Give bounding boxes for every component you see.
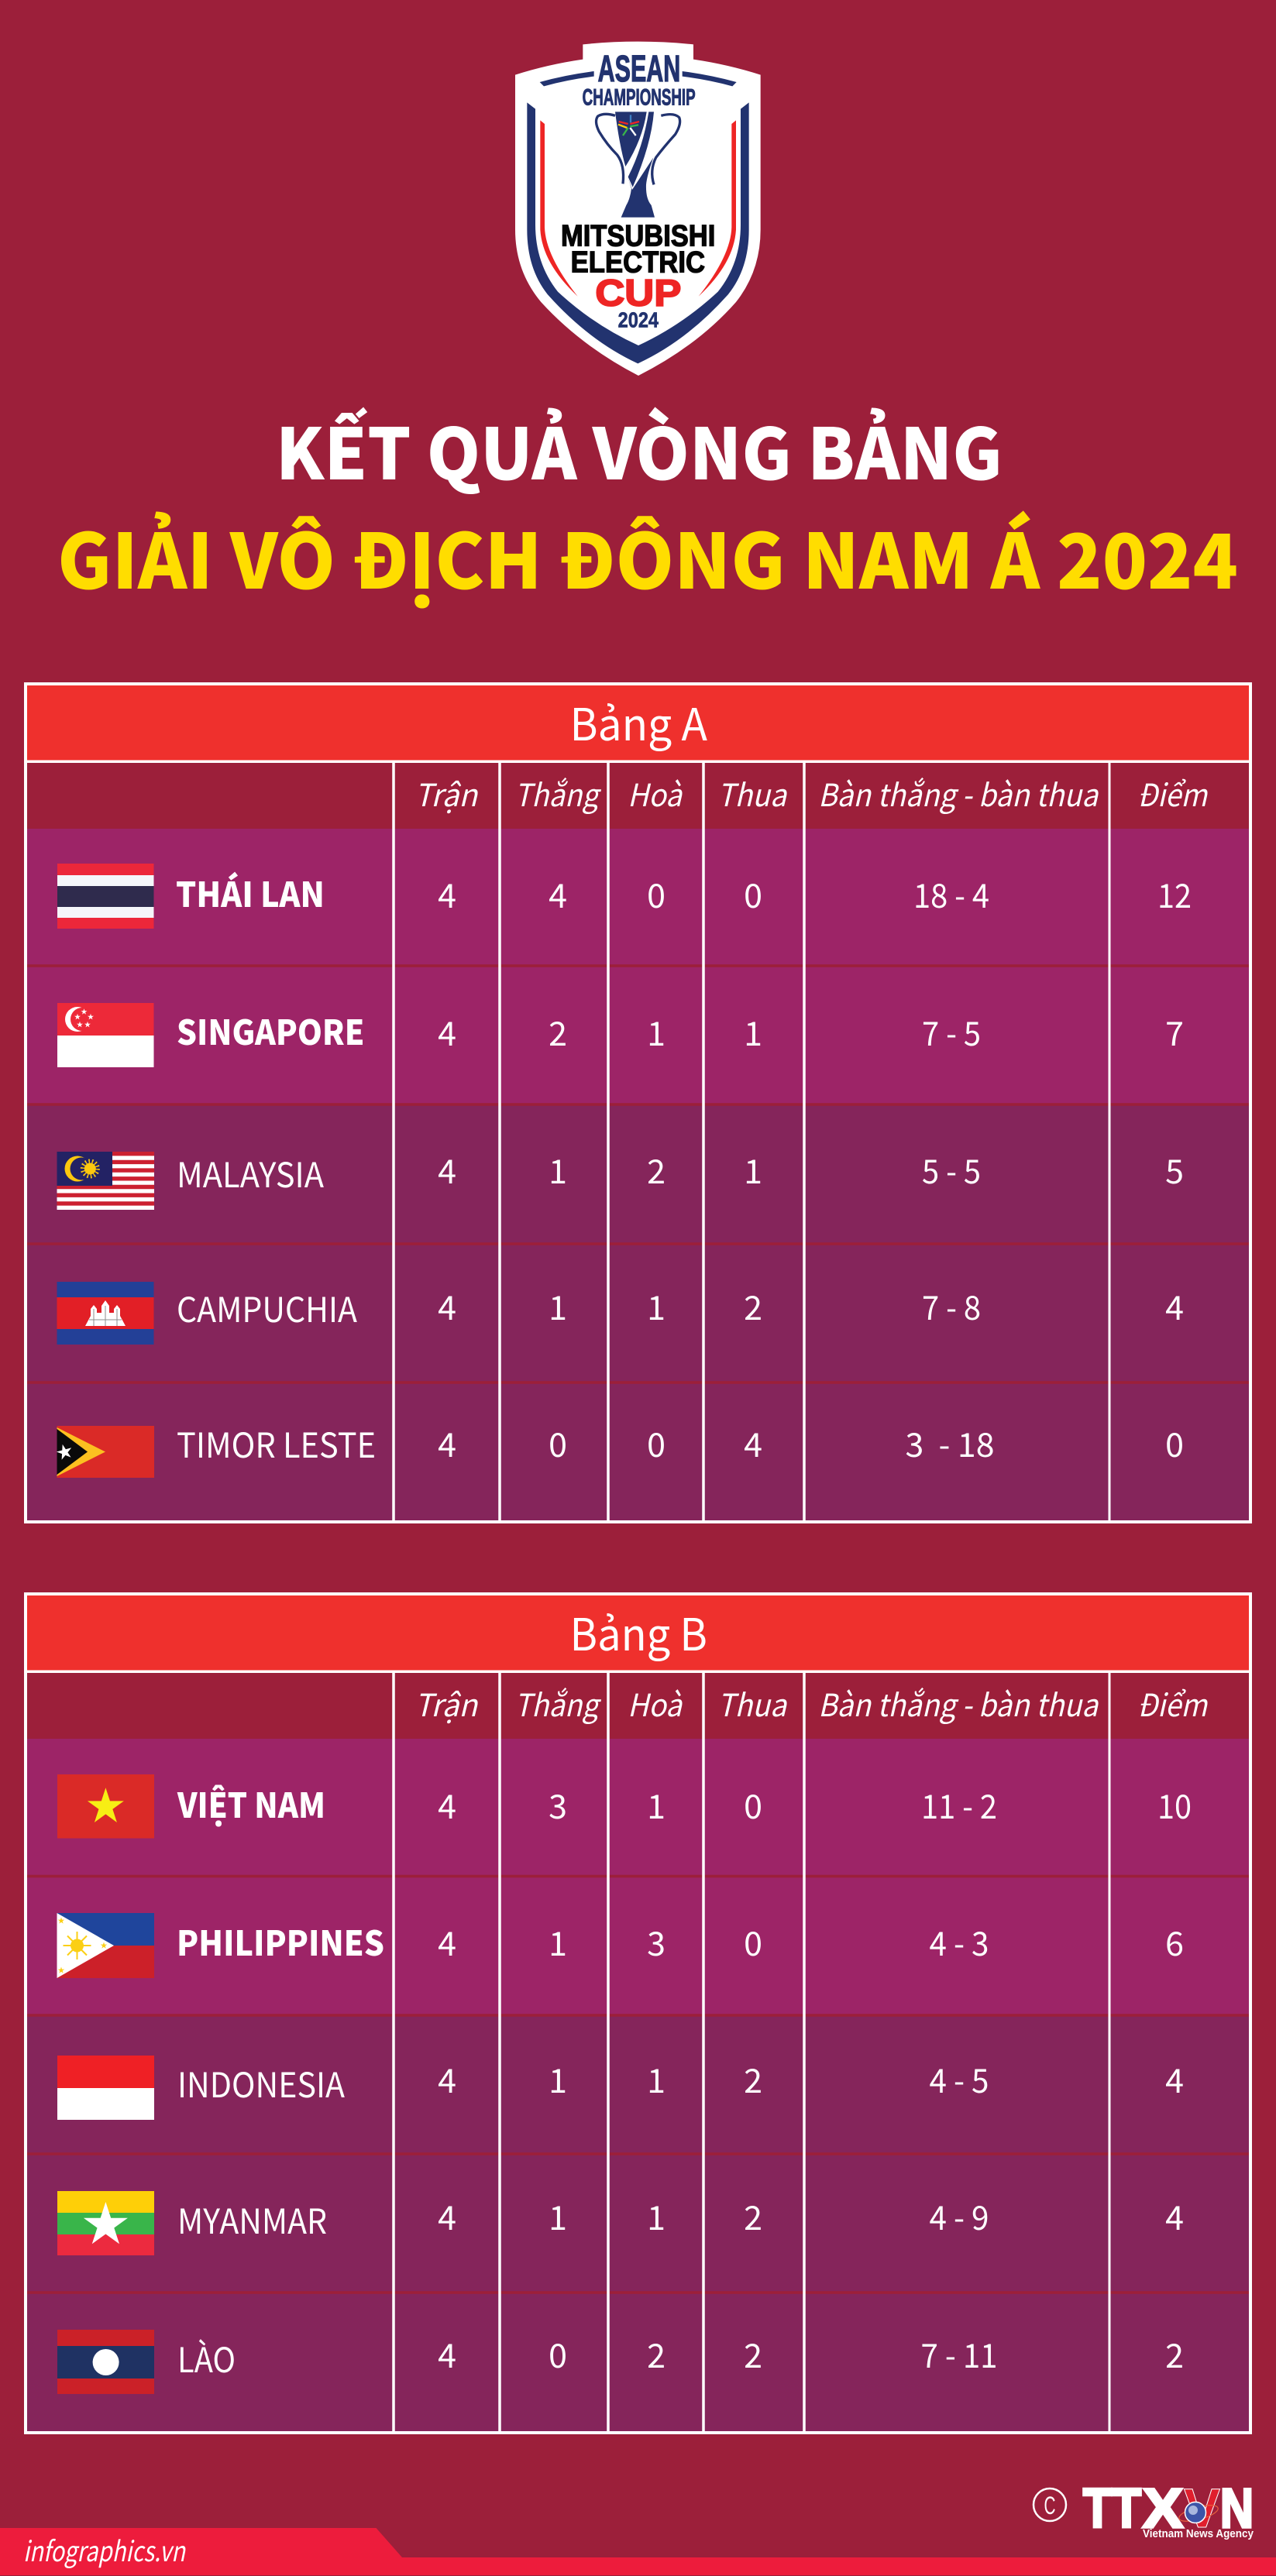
row: Myanmar: 4 - 9: [930, 2192, 989, 2240]
row: Philippines: 4 - 3: [930, 1918, 989, 1966]
column headers: [414, 1681, 1209, 1726]
row: Myanmar: 1: [647, 2192, 666, 2240]
row: Campuchia: 7 - 8: [922, 1282, 981, 1330]
row: Philippines: 4: [438, 1918, 456, 1966]
panel: Bảng A table: [24, 684, 1252, 1523]
row: Indonesia: 2: [744, 2055, 762, 2103]
logo: TTXVN Vietnam News Agency: N: [1220, 2478, 1254, 2540]
column headers: Trận: [414, 1681, 479, 1726]
row: Singapore: 1: [647, 1008, 666, 1056]
row: Myanmar: 1: [549, 2192, 567, 2240]
column headers: Điểm: [1137, 771, 1209, 816]
logo: ASEAN Championship Mitsubishi Electric Cup 2024: ASEAN: [598, 49, 680, 90]
row: Việt Nam: 10: [1157, 1781, 1192, 1829]
row: Lào: 2: [1165, 2330, 1184, 2378]
logo: ASEAN Championship Mitsubishi Electric Cup 2024: [515, 42, 761, 376]
icon: flag of Indonesia: [57, 2056, 154, 2120]
row: Indonesia: 4: [438, 2055, 456, 2103]
row: Campuchia: 4: [1165, 1282, 1184, 1330]
row: Campuchia: 1: [647, 1282, 666, 1330]
row: Myanmar: 4: [438, 2192, 456, 2240]
row: Campuchia: [57, 1282, 1184, 1345]
row: Thái Lan: [57, 864, 1192, 929]
icon: flag of Singapore: [57, 1003, 153, 1067]
row: Timor Leste: 4: [438, 1419, 456, 1467]
row: Timor Leste: 3 - 18: [905, 1419, 995, 1467]
row: Singapore: [57, 1003, 1184, 1067]
row: Philippines: [57, 1913, 1184, 1978]
row: Campuchia: CAMPUCHIA: [177, 1283, 357, 1332]
heading: Bảng B: Bảng B: [570, 1600, 707, 1664]
row: Lào: 7 - 11: [920, 2330, 998, 2378]
row: Timor Leste: 0: [647, 1419, 666, 1467]
row: Thái Lan: 4: [438, 870, 456, 918]
row: Lào: LÀO: [177, 2333, 236, 2382]
icon: flag of Philippines: [57, 1913, 154, 1978]
row: Singapore: SINGAPORE: [177, 1005, 364, 1055]
row: Thái Lan: 4: [549, 870, 567, 918]
column headers: Bàn thắng - bàn thua: [818, 1681, 1099, 1726]
heading: Bảng A: Bảng A: [570, 690, 707, 754]
row: Myanmar: 2: [744, 2192, 762, 2240]
row: Việt Nam: [57, 1774, 1192, 1839]
panel: Bảng B table: [24, 1594, 1252, 2434]
row: Singapore: 7: [1165, 1008, 1184, 1056]
row: Indonesia: 1: [647, 2055, 666, 2103]
row: Việt Nam: 3: [549, 1781, 567, 1829]
row: Việt Nam: 11 - 2: [921, 1781, 997, 1829]
column headers: Thua: [717, 1681, 788, 1726]
column headers: Trận: [414, 771, 479, 816]
column headers: Thắng: [514, 1681, 602, 1726]
row: Timor Leste: 0: [549, 1419, 567, 1467]
column headers: Hoà: [628, 1681, 683, 1726]
row: Lào: 2: [744, 2330, 762, 2378]
icon: flag of Myanmar: [57, 2191, 154, 2255]
row: Thái Lan: THÁI LAN: [176, 867, 325, 917]
row: Việt Nam: VIỆT NAM: [177, 1778, 325, 1828]
row: Việt Nam: 1: [647, 1781, 666, 1829]
column headers: Bàn thắng - bàn thua: [818, 771, 1099, 816]
row: Indonesia: [57, 2055, 1184, 2120]
title: [57, 398, 1238, 611]
row: Campuchia: 4: [438, 1282, 456, 1330]
row: Indonesia: INDONESIA: [177, 2058, 345, 2107]
row: Timor Leste: 4: [744, 1419, 762, 1467]
row: Campuchia: 1: [549, 1282, 567, 1330]
row: Lào: 4: [438, 2330, 456, 2378]
row: Philippines: 3: [647, 1918, 666, 1966]
row: Malaysia: 4: [438, 1145, 456, 1194]
logo: ASEAN Championship Mitsubishi Electric Cup 2024: CUP: [595, 272, 681, 314]
title: GIẢI VÔ ĐỊCH ĐÔNG NAM Á 2024: [57, 501, 1238, 611]
row: Thái Lan: 0: [647, 870, 666, 918]
row: Malaysia: 1: [549, 1145, 567, 1194]
row: Timor Leste: 0: [1165, 1419, 1184, 1467]
row: Lào: 2: [647, 2330, 666, 2378]
icon: flag of Timor Leste: [55, 1426, 154, 1478]
row: Timor Leste: [55, 1418, 1184, 1478]
row: Singapore: 2: [549, 1008, 567, 1056]
row: Malaysia: 1: [744, 1145, 762, 1194]
row: Philippines: PHILIPPINES: [177, 1916, 384, 1966]
row: Việt Nam: 4: [438, 1781, 456, 1829]
logo: TTXVN Vietnam News Agency: V: [1184, 2478, 1220, 2540]
row: Thái Lan: 18 - 4: [913, 870, 989, 918]
row: Malaysia: MALAYSIA: [177, 1148, 324, 1197]
column headers: Hoà: [628, 771, 683, 816]
logo: TTXVN Vietnam News Agency: T: [1083, 2478, 1112, 2540]
logo: ASEAN Championship Mitsubishi Electric Cup 2024: ELECTRIC: [571, 246, 705, 280]
row: Indonesia: 1: [549, 2055, 567, 2103]
icon: flag of Vietnam: [57, 1774, 154, 1839]
row: Việt Nam: 0: [744, 1781, 762, 1829]
icon: copyright symbol: [1034, 2488, 1066, 2521]
column headers: [414, 771, 1209, 816]
logo: ASEAN Championship Mitsubishi Electric Cup 2024: 2024: [618, 307, 659, 331]
row: Singapore: 4: [438, 1008, 456, 1056]
row: Malaysia: 5: [1165, 1145, 1184, 1194]
row: Philippines: 0: [744, 1918, 762, 1966]
row: Lào: 0: [549, 2330, 567, 2378]
icon: flag of Malaysia: [57, 1152, 154, 1210]
icon: flag of Laos: [57, 2330, 154, 2394]
icon: flag of Cambodia: [57, 1282, 153, 1345]
title: KẾT QUẢ VÒNG BẢNG: [276, 398, 1003, 500]
logo: TTXVN Vietnam News Agency: [1083, 2478, 1254, 2540]
icon: copyright symbol: C: [1044, 2492, 1055, 2519]
row: Campuchia: 2: [744, 1282, 762, 1330]
row: Myanmar: 4: [1165, 2192, 1184, 2240]
column headers: Thắng: [514, 771, 602, 816]
row: Malaysia: 5 - 5: [922, 1145, 981, 1194]
icon: flag of Thailand: [57, 864, 153, 929]
footer text: infographics.vn: infographics.vn: [23, 2530, 187, 2570]
row: Timor Leste: TIMOR LESTE: [177, 1418, 376, 1468]
row: Philippines: 6: [1165, 1918, 1184, 1966]
row: Myanmar: MYANMAR: [177, 2194, 327, 2244]
row: Lào: [57, 2330, 1184, 2394]
row: Singapore: 7 - 5: [922, 1008, 981, 1056]
column headers: Thua: [717, 771, 788, 816]
logo: TTXVN Vietnam News Agency: X: [1143, 2478, 1183, 2540]
row: Indonesia: 4 - 5: [930, 2055, 989, 2103]
column headers: Điểm: [1137, 1681, 1209, 1726]
row: Thái Lan: 0: [744, 870, 762, 918]
row: Malaysia: [57, 1145, 1184, 1210]
footer band: [0, 2528, 1276, 2575]
logo: TTXVN Vietnam News Agency: Vietnam News Agency: [1143, 2527, 1254, 2540]
row: Philippines: 1: [549, 1918, 567, 1966]
logo: TTXVN Vietnam News Agency: T: [1112, 2478, 1141, 2540]
row: Myanmar: [57, 2191, 1184, 2255]
logo: ASEAN Championship Mitsubishi Electric Cup 2024: CHAMPIONSHIP: [583, 84, 696, 110]
logo: ASEAN Championship Mitsubishi Electric Cup 2024: MITSUBISHI: [561, 219, 715, 252]
row: Thái Lan: 12: [1157, 870, 1192, 918]
row: Indonesia: 4: [1165, 2055, 1184, 2103]
row: Singapore: 1: [744, 1008, 762, 1056]
row: Malaysia: 2: [647, 1145, 666, 1194]
